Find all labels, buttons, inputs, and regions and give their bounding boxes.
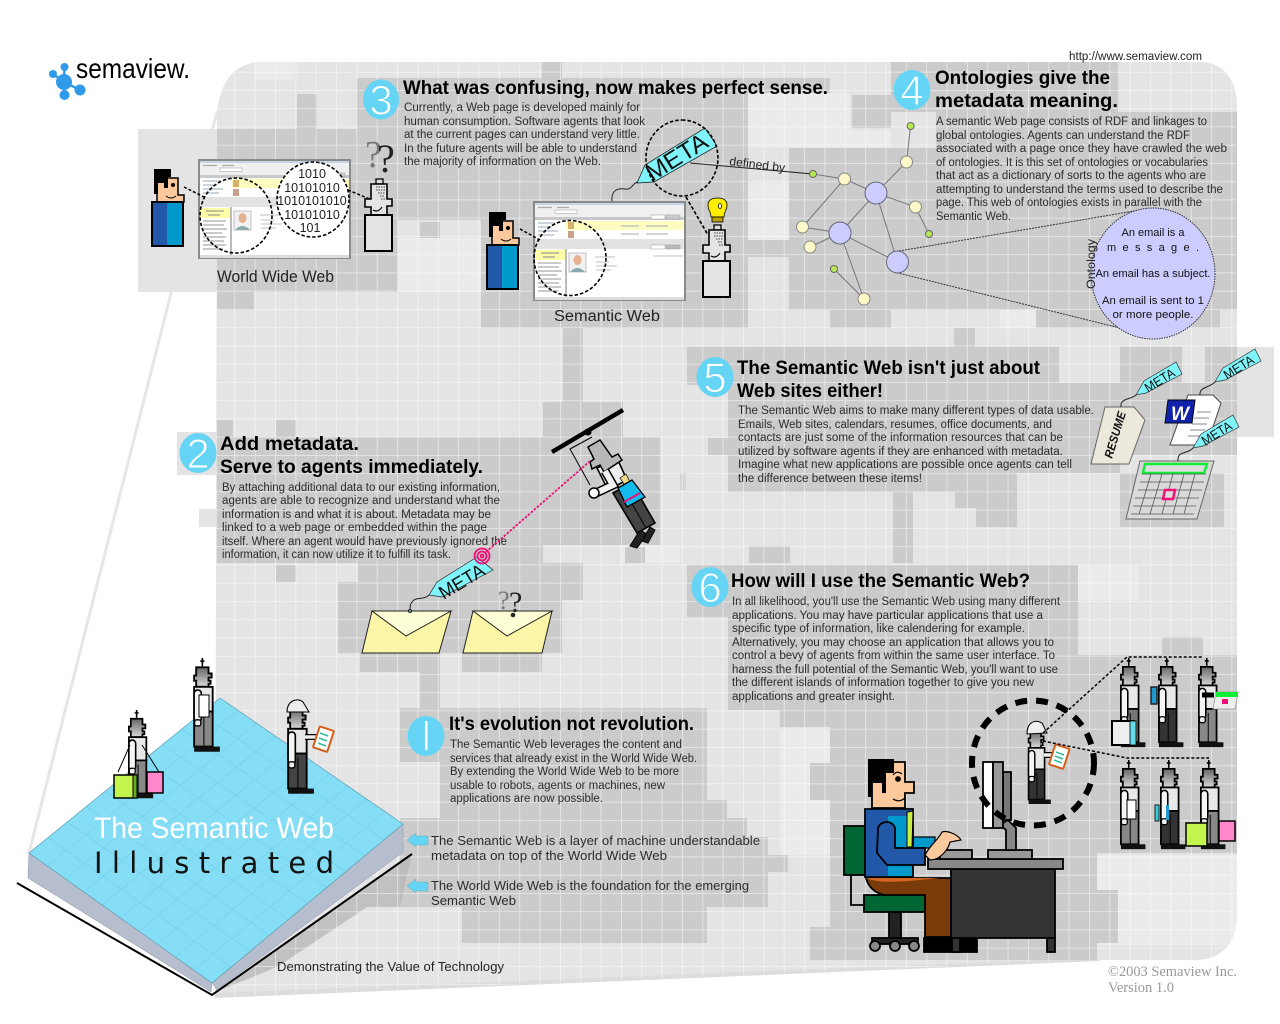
body text 4: that act as a dictionary of sorts to the agents who are — [936, 170, 1206, 182]
body text 3: In the future agents will be able to understand — [404, 143, 637, 155]
meta tag: META — [435, 560, 489, 604]
label: Semantic Web — [554, 308, 660, 325]
binary ellipse: 1010 — [298, 167, 326, 181]
ontology bubble — [1091, 208, 1215, 339]
word document — [1165, 395, 1221, 445]
number badge 2 — [180, 430, 216, 477]
ontology bubble: An email is a — [1122, 227, 1185, 239]
agent with tools — [1155, 760, 1185, 849]
body text 4: A semantic Web page consists of RDF and linkages to — [936, 116, 1207, 128]
pink laser line — [486, 461, 590, 552]
heading 5: Web sites either! — [737, 381, 883, 402]
arrow note: semantic web layer — [407, 833, 760, 863]
agent with helmet and clipboard on platform — [287, 700, 334, 794]
copyright: Version 1.0 — [1108, 980, 1174, 996]
body text 2: linked to a web page or embedded within the page — [222, 522, 487, 534]
number badge 4: 4 — [900, 67, 924, 114]
section 6: how will i use — [692, 564, 1238, 952]
url: http://www.semaview.com — [1069, 51, 1202, 63]
title: The Semantic Web — [94, 812, 334, 845]
binary ellipse: 101 — [300, 221, 320, 235]
body text 1: usable to robots, agents or machines, new — [450, 780, 666, 792]
body text 1: applications are now possible. — [450, 793, 603, 805]
agent with shopping bags — [1186, 760, 1235, 849]
section 3: confusing — [363, 76, 828, 168]
arrow note: semantic web layer: metadata on top of the World Wide Web — [431, 848, 667, 863]
platform: layered web — [17, 698, 412, 995]
meta tag: word: META — [1221, 352, 1257, 382]
world wide web layer — [28, 824, 403, 992]
binary ellipse: 1010101010 — [277, 194, 347, 208]
flying agent with rotor — [552, 410, 655, 548]
meta tag — [410, 557, 493, 611]
arrow note: semantic web layer: The Semantic Web is a layer of machine understandable — [431, 833, 760, 848]
section 2: add metadata — [180, 410, 655, 653]
number badge 3: 3 — [369, 76, 393, 124]
envelope with question marks — [463, 611, 552, 653]
ontology label: Ontology — [1084, 239, 1098, 289]
meta link squiggle — [612, 182, 637, 201]
heading 4 — [935, 68, 1118, 112]
resume document — [1091, 407, 1145, 464]
body text 6: specific type of information, like calendering for example. — [732, 623, 1025, 635]
arrow note: world wide web layer: The World Wide Web is the foundation for the emerging — [431, 878, 749, 893]
agent group — [1112, 658, 1238, 849]
heading 2: Add metadata. — [220, 434, 359, 455]
body text 6: harness the full potential of the Semantic Web, you'll want to use — [732, 664, 1058, 676]
agent with apron — [1121, 760, 1145, 849]
body text 5: utilized by software agents if they are enhanced with metadata. — [738, 446, 1063, 458]
body text 3: human consumption. Software agents that look — [404, 116, 645, 128]
black base line — [17, 854, 412, 995]
heading 3: What was confusing, now makes perfect sense. — [403, 78, 828, 99]
body text 5: contacts are just some of the information resources that can be — [738, 432, 1063, 444]
copyright — [1108, 964, 1237, 996]
arrow note: world wide web layer: Semantic Web — [431, 893, 516, 908]
body text 1: services that already exist in the World Wide Web. — [450, 753, 697, 765]
question marks: ? — [498, 586, 510, 615]
illustration: world wide web — [152, 134, 395, 286]
body text 2 — [222, 482, 507, 561]
ontology bubble: An email has a subject. — [1096, 268, 1210, 280]
body text 6: the different islands of information together to give you new — [732, 677, 1035, 689]
meta tag: calendar: META — [1199, 418, 1235, 448]
dashed link and ellipse — [520, 220, 606, 296]
body text 5: The Semantic Web aims to make many different types of data usable. — [738, 405, 1094, 417]
person — [487, 212, 519, 289]
heading 2 — [220, 434, 483, 478]
body text 5 — [738, 405, 1094, 485]
body text 6: In all likelihood, you'll use the Semantic Web using many different — [732, 596, 1061, 608]
title — [94, 812, 334, 880]
agent with blueprint — [1112, 658, 1145, 747]
browser window — [199, 160, 350, 258]
agent with pack — [1151, 658, 1183, 747]
body text 2: By attaching additional data to our existing information, — [222, 482, 500, 494]
body text 4: page. This web of ontologies exists in parallel with the — [936, 197, 1202, 209]
body text 5: the difference between these items! — [738, 473, 922, 485]
body text 3: Currently, a Web page is developed mainly for — [404, 102, 640, 114]
body text 4: associated with a page once they have crawled the web — [936, 143, 1227, 155]
binary ellipse: 10101010 — [284, 181, 340, 195]
ontology network graph — [690, 122, 1140, 328]
body text 2: agents are able to recognize and understand what the — [222, 495, 500, 507]
label: World Wide Web — [217, 267, 334, 286]
body text 4: attempting to understand the terms used to describe the — [936, 184, 1223, 196]
title: Illustrated — [94, 846, 334, 880]
body text 5: Imagine what new applications are possible once agents can tell — [738, 459, 1072, 471]
logo: semaview: semaview. — [76, 53, 190, 84]
body text 3: the majority of information on the Web. — [404, 156, 601, 168]
dashed magnifier circle — [972, 700, 1094, 826]
dashed ellipse over content — [200, 178, 272, 253]
illustration: semantic web — [487, 120, 730, 325]
dashed ellipse — [646, 120, 718, 235]
ontology bubble: An email is sent to 1 — [1102, 295, 1204, 307]
body text 6: Alternatively, you may choose an application that allows you to — [732, 637, 1054, 649]
dashed links — [184, 187, 372, 200]
body text 4: Semantic Web. — [936, 211, 1011, 223]
agent with apron on platform — [194, 658, 220, 752]
binary ellipse: 10101010 — [284, 208, 340, 222]
body text 4: of ontologies. It is this set of ontologies or vocabularies — [936, 157, 1208, 169]
logo: semaview — [49, 53, 190, 100]
arrow note: world wide web layer — [407, 878, 749, 908]
body text 6: applications and greater insight. — [732, 691, 895, 703]
body text 2: information, it can now utilize it to fulfill its task. — [222, 549, 451, 561]
ontology bubble: message. — [1107, 242, 1199, 254]
body text 6: applications. You may have particular applications that use a — [732, 610, 1044, 622]
question marks — [498, 586, 522, 619]
resume document: RESUME — [1101, 409, 1129, 460]
body text 1 — [450, 739, 697, 805]
section 1: evolution — [408, 714, 697, 805]
target — [474, 548, 490, 564]
question marks — [365, 134, 395, 181]
browser window — [534, 202, 685, 300]
robot agent — [703, 225, 730, 297]
body text 1: The Semantic Web leverages the content and — [450, 739, 682, 751]
question marks: ? — [509, 586, 522, 619]
semantic web layer — [29, 698, 403, 983]
body text 1: By extending the World Wide Web to be more — [450, 766, 679, 778]
envelope with metadata — [362, 610, 451, 653]
lightbulb — [708, 198, 727, 222]
dashed links to agents — [1043, 657, 1209, 758]
body text 4: global ontologies. Agents can understand the RDF — [936, 130, 1190, 142]
meta tag: word — [1200, 349, 1261, 395]
platform grid — [47, 711, 385, 970]
number badge 3 — [363, 76, 399, 124]
section 5: not just web sites — [696, 349, 1261, 519]
meta tag: calendar — [1178, 415, 1239, 461]
calendar — [1126, 461, 1214, 519]
heading 4: metadata meaning. — [935, 91, 1118, 112]
number badge 6: 6 — [698, 564, 722, 611]
heading 5: The Semantic Web isn't just about — [737, 358, 1041, 379]
heading 5 — [737, 358, 1041, 402]
number badge 1 — [408, 716, 444, 756]
person — [152, 169, 184, 246]
heading 4: Ontologies give the — [935, 68, 1110, 89]
number badge 5 — [696, 354, 734, 401]
body text 3 — [404, 102, 645, 168]
word document: W — [1171, 404, 1191, 425]
body text 6: control a bevy of agents from within the same user interface. To — [732, 650, 1055, 662]
body text 4 — [936, 116, 1227, 223]
body text 2: information is and what it is about. Metadata may be — [222, 509, 491, 521]
body text 6 — [732, 596, 1061, 703]
section 4: ontologies — [690, 67, 1227, 339]
heading 2: Serve to agents immediately. — [220, 457, 483, 478]
meta tag: resume: META — [1142, 365, 1178, 395]
body text 3: at the current pages can understand very little. — [404, 129, 640, 141]
agent with shopping bags on platform — [114, 710, 163, 798]
question marks: ? — [365, 134, 382, 176]
desk with computer and user — [844, 759, 1063, 952]
meta tag: resume — [1121, 362, 1182, 407]
zoomed agent with clipboard — [1027, 721, 1070, 804]
body text 5: Emails, Web sites, calendars, resumes, office documents, and — [738, 419, 1052, 431]
number badge 2: 2 — [186, 430, 210, 477]
robot agent — [365, 179, 392, 251]
number badge 6 — [692, 564, 728, 611]
meta tag: META — [641, 128, 713, 187]
number badge 5: 5 — [703, 354, 727, 401]
binary ellipse — [277, 162, 349, 237]
tagline: Demonstrating the Value of Technology — [277, 959, 505, 974]
heading 1: It's evolution not revolution. — [449, 714, 694, 735]
question marks: ? — [377, 136, 395, 181]
ontology bubble: or more people. — [1112, 309, 1194, 321]
body text 2: itself. Where an agent would have previously ignored the — [222, 536, 507, 548]
number badge 4 — [894, 67, 930, 114]
copyright: ©2003 Semaview Inc. — [1108, 964, 1237, 980]
defined by label: defined by — [729, 154, 786, 175]
heading 6: How will I use the Semantic Web? — [731, 571, 1030, 592]
agent with calendar — [1199, 658, 1238, 747]
